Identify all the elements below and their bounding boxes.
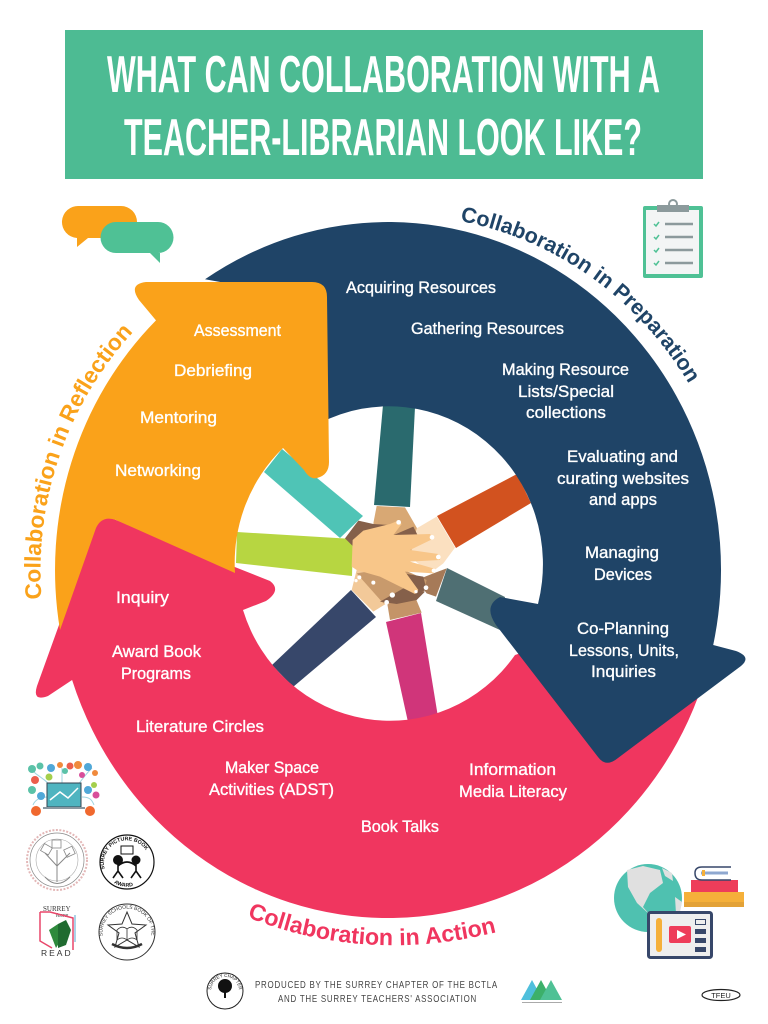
footer: credits text: AND THE SURREY TEACHERS' ASSOCIATION [278,993,477,1005]
arm: burnt orange sleeve [437,474,531,548]
icon: surrey schools book of the year seal [98,904,156,960]
heading: collaboration in preparation: Collaboration in Preparation [462,208,697,383]
footer: credits text [255,979,498,1005]
icon: surrey teacher-librarians seal [27,830,87,890]
panel: collaboration in preparation (navy arrow) [205,222,745,763]
heading: collaboration in reflection: Collaboration in Reflection [24,326,132,598]
globe [614,864,682,932]
text block: reflection activities: Networking [115,461,201,480]
text block: action activities [112,588,567,836]
text block: preparation activities [346,278,689,681]
text block: preparation activities: collections [526,403,606,422]
text block: preparation activities: Devices [594,565,652,584]
arm: lime sleeve [236,532,353,576]
icon: surrey picture book award seal [99,834,155,890]
text block: action activities: Book Talks [361,817,439,836]
icon: surrey picture book award seal: AWARD [114,880,133,887]
book stack [684,867,744,907]
icon: speech bubbles [62,206,174,263]
text block: preparation activities: Lessons, Units, [569,641,679,660]
text block: preparation activities: Making Resource [502,360,629,379]
text block: action activities: Inquiry [116,588,170,607]
footer: union bug [702,990,740,1000]
icon: surrey teens read logo: SURREY [43,905,71,913]
text block: reflection activities [115,321,281,480]
text block: preparation activities: Inquiries [591,662,656,681]
text block: preparation activities: Acquiring Resources [346,278,496,297]
icon: globe, books and video tablet [614,864,744,958]
title banner [65,30,703,179]
text block: preparation activities: curating websites [557,469,689,488]
panel: collaboration in reflection (orange arrow) [55,282,329,630]
icon: clipboard checklist [643,200,703,278]
text block: action activities: Maker Space [225,758,319,777]
text block: preparation activities: Co-Planning [577,619,669,638]
footer: credits text: PRODUCED BY THE SURREY CHAPTER OF THE BCTLA [255,979,498,991]
text block: reflection activities: Debriefing [174,361,252,380]
panel: collaboration in action (red arrow) [36,518,707,918]
heading: collaboration in action: Collaboration in Action [250,904,496,946]
arm: aqua sleeve [264,449,363,538]
video tablet [648,912,712,958]
hands-in illustration at centre [236,405,531,722]
text block: action activities: Programs [121,664,191,683]
arm: dark slate sleeve [272,590,376,687]
footer: surrey chapter logo [206,972,244,1010]
text block: action activities: Media Literacy [459,782,567,801]
icon: surrey picture book award seal: SURREY PICTURE BOOK [100,836,149,870]
footer: union bug: TFEU [711,991,731,1000]
footer: mountains logo [521,980,562,1003]
icon: surrey teens read logo: READ [41,948,73,958]
text block: action activities: Literature Circles [136,717,264,736]
icon: surrey teens read logo: Teens [55,913,69,919]
text block: preparation activities: and apps [589,490,657,509]
footer: surrey chapter logo: SURREY CHAPTER [208,974,242,990]
text block: action activities: Information [469,760,556,779]
icon: surrey teens read logo [40,905,75,958]
arm: magenta sleeve [386,613,438,722]
text block: reflection activities: Assessment [194,321,281,340]
arm: dark teal sleeve [374,405,415,507]
text block: action activities: Award Book [112,642,201,661]
icon: surrey schools book of the year seal: SURREY SCHOOLS BOOK OF THE YEAR [100,905,154,936]
text block: reflection activities: Mentoring [140,408,217,427]
icon: laptop with app cluster [28,761,100,816]
text block: preparation activities: Managing [585,543,659,562]
hands [345,506,455,620]
text block: preparation activities: Gathering Resources [411,319,564,338]
text block: action activities: Activities (ADST) [209,780,334,799]
text block: preparation activities: Lists/Special [518,382,614,401]
text block: preparation activities: Evaluating and [567,447,678,466]
arm: slate green sleeve [436,568,505,630]
